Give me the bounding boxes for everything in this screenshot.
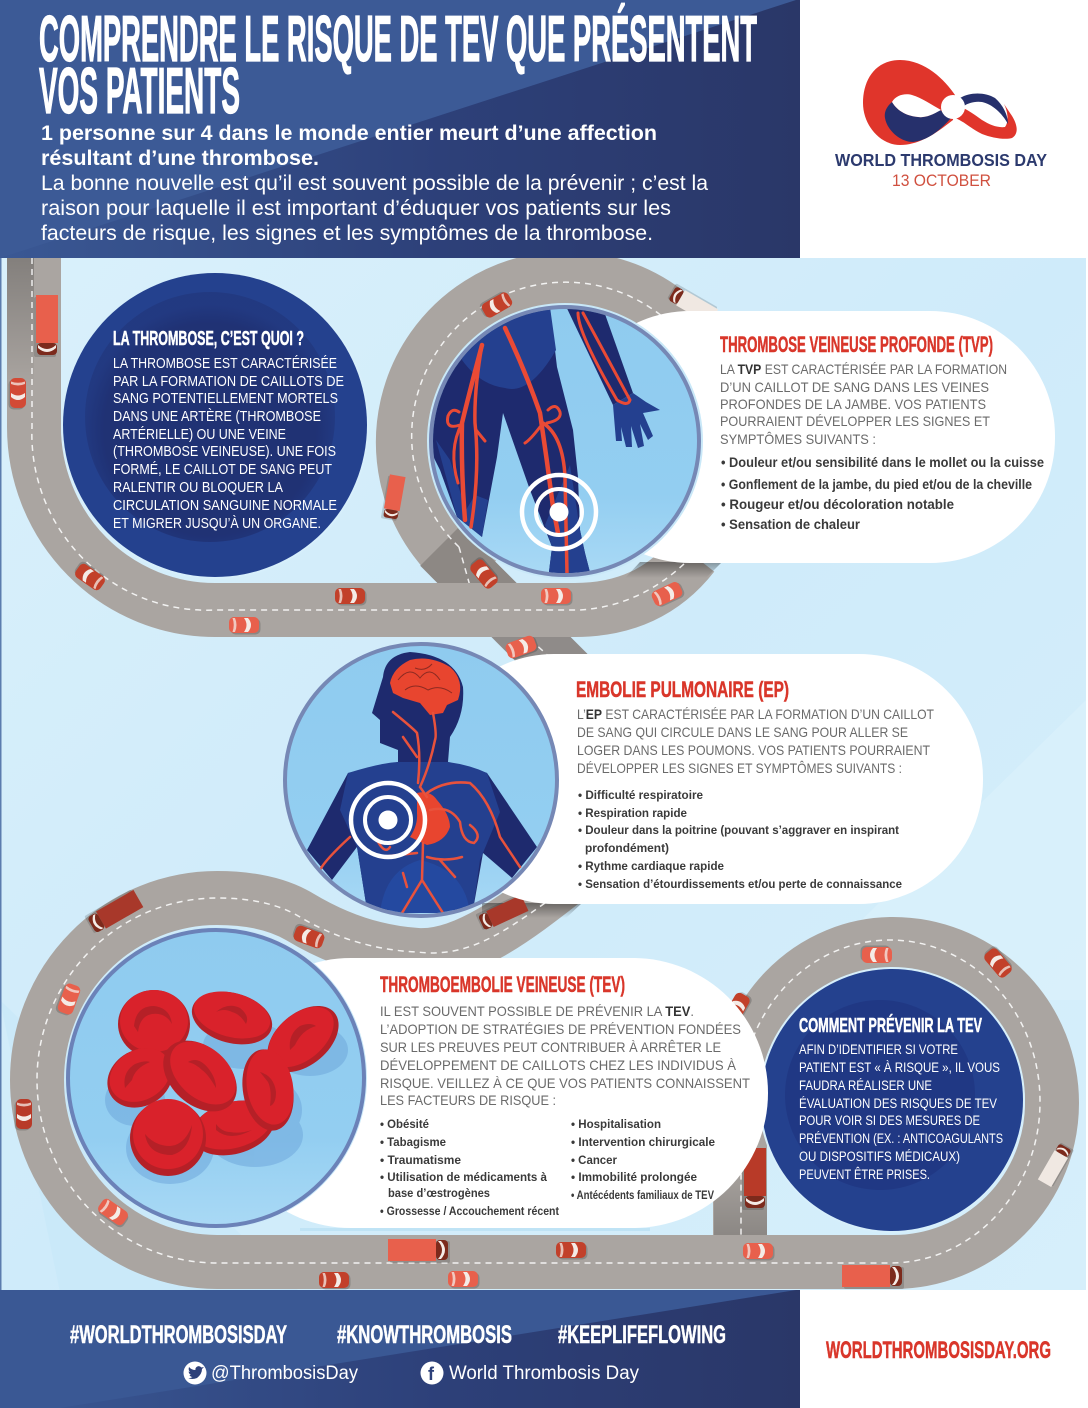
body text: AFIN D’IDENTIFIER SI VOTRE (799, 1042, 958, 1057)
symptom list: • Respiration rapide (578, 806, 687, 820)
road network (7, 255, 1052, 1263)
risk factors: left column (380, 1117, 559, 1218)
title (39, 2, 757, 127)
logo: World Thrombosis Day: WORLD THROMBOSIS DAY (835, 150, 1047, 170)
body text: POUR VOIR SI DES MESURES DE (799, 1113, 980, 1128)
panel: la thrombose (61, 271, 369, 579)
symptom list: • Sensation d’étourdissements et/ou perte de connaissance (578, 877, 902, 891)
body text: FORMÉ, LE CAILLOT DE SANG PEUT (113, 461, 332, 478)
symptom list: • Rythme cardiaque rapide (578, 859, 724, 873)
description: RISQUE. VEILLEZ À CE QUE VOS PATIENTS CONNAISSENT (380, 1075, 750, 1091)
body text: (THROMBOSE VEINEUSE). UNE FOIS (113, 444, 336, 460)
body text: FAUDRA RÉALISER UNE (799, 1078, 932, 1093)
body text: ARTÉRIELLE) OU UNE VEINE (113, 426, 286, 443)
body text: SANG POTENTIELLEMENT MORTELS (113, 391, 338, 407)
panel: thrombose veineuse profonde (425, 300, 1055, 580)
body text: ET MIGRER JUSQU’À UN ORGANE. (113, 515, 321, 532)
description (720, 361, 1007, 447)
risk factors: left column: • Traumatisme (380, 1153, 461, 1167)
body text: PEUVENT ÊTRE PRISES. (799, 1167, 930, 1182)
body text: PRÉVENTION (EX. : ANTICOAGULANTS (799, 1131, 1003, 1146)
description: DÉVELOPPEMENT DE CAILLOTS CHEZ LES INDIVIDUS À (380, 1057, 737, 1073)
facebook page: f (428, 1364, 435, 1384)
risk factors: right column: • Immobilité prolongée (571, 1170, 697, 1184)
description: IL EST SOUVENT POSSIBLE DE PRÉVENIR LA TEV. (380, 1003, 694, 1019)
heading: EMBOLIE PULMONAIRE (EP) (576, 677, 789, 702)
vehicles on the roads (8, 283, 1074, 1289)
description: LES FACTEURS DE RISQUE : (380, 1092, 556, 1108)
footer banner (0, 1290, 1088, 1408)
risk factors: left column: • Tabagisme (380, 1135, 446, 1149)
risk factors: right column: • Cancer (571, 1153, 617, 1167)
body text: PATIENT EST « À RISQUE », IL VOUS (799, 1060, 1000, 1075)
heading: LA THROMBOSE, C’EST QUOI ? (113, 328, 304, 350)
intro text: La bonne nouvelle est qu’il est souvent possible de la prévenir ; c’est la (41, 172, 708, 195)
panel: embolie pulmonaire (285, 644, 983, 916)
target marker (351, 783, 425, 857)
description (577, 706, 934, 776)
risk factors: right column: • Antécédents familiaux de TEV (571, 1188, 714, 1202)
body text: RALENTIR OU BLOQUER LA (113, 480, 283, 496)
intro text: 1 personne sur 4 dans le monde entier meurt d’une affection (41, 122, 657, 145)
symptom list: • Douleur dans la poitrine (pouvant s’aggraver en inspirant (578, 823, 899, 837)
body text (113, 355, 344, 532)
description: LOGER DANS LES POUMONS. VOS PATIENTS POURRAIENT (577, 742, 930, 758)
heading: THROMBOEMBOLIE VEINEUSE (TEV) (380, 972, 625, 997)
symptom list: profondément) (585, 841, 669, 855)
symptom list: • Rougeur et/ou décoloration notable (721, 496, 954, 512)
illustration: legs and veins (425, 300, 703, 580)
body text: PAR LA FORMATION DE CAILLOTS DE (113, 374, 344, 390)
body text: LA THROMBOSE EST CARACTÉRISÉE (113, 355, 337, 372)
symptom list: • Difficulté respiratoire (578, 788, 703, 802)
body text (799, 1042, 1003, 1182)
facebook page: World Thrombosis Day (449, 1363, 639, 1384)
symptom list: • Sensation de chaleur (721, 516, 860, 532)
description: POURRAIENT DÉVELOPPER LES SIGNES ET (720, 413, 990, 429)
body text: ÉVALUATION DES RISQUES DE TEV (799, 1096, 997, 1111)
illustration: upper body, brain, heart (285, 644, 557, 916)
description: SYMPTÔMES SUIVANTS : (720, 431, 876, 447)
symptom list (721, 454, 1044, 532)
description: SUR LES PREUVES PEUT CONTRIBUER À ARRÊTER LE (380, 1039, 721, 1055)
risk factors: left column: base d’œstrogènes (388, 1186, 490, 1200)
panel: comment prevenir la TEV (759, 967, 1025, 1233)
risk factors: left column: • Obésité (380, 1117, 429, 1131)
risk factors: right column: • Intervention chirurgicale (571, 1135, 715, 1149)
symptom list: • Gonflement de la jambe, du pied et/ou de la cheville (721, 476, 1032, 492)
description: PROFONDES DE LA JAMBE. VOS PATIENTS (720, 396, 986, 412)
logo: World Thrombosis Day: 13 OCTOBER (892, 172, 991, 190)
intro text: facteurs de risque, les signes et les symptômes de la thrombose. (41, 222, 653, 245)
intro text: raison pour laquelle il est important d’éduquer vos patients sur les (41, 197, 671, 220)
heading: COMMENT PRÉVENIR LA TEV (799, 1014, 982, 1037)
illustration: red blood cells (65, 927, 367, 1229)
body text: DANS UNE ARTÈRE (THROMBOSE (113, 408, 321, 425)
symptom list (578, 788, 902, 891)
title: VOS PATIENTS (39, 54, 240, 127)
risk factors: left column: • Grossesse / Accouchement récent (380, 1204, 559, 1218)
description: LA TVP EST CARACTÉRISÉE PAR LA FORMATION (720, 361, 1007, 377)
intro text: résultant d’une thrombose. (41, 147, 319, 170)
hashtags: #KNOWTHROMBOSIS (337, 1321, 512, 1349)
intro text (41, 122, 708, 245)
description: DE SANG QUI CIRCULE DANS LE SANG POUR ALLER SE (577, 724, 908, 740)
page background (0, 255, 1086, 1292)
description (380, 1003, 750, 1108)
risk factors: right column (571, 1117, 715, 1202)
hashtags: #WORLDTHROMBOSISDAY (70, 1321, 287, 1349)
description: D’UN CAILLOT DE SANG DANS LES VEINES (720, 379, 989, 395)
twitter handle: @ThrombosisDay (211, 1363, 358, 1384)
body text: CIRCULATION SANGUINE NORMALE (113, 498, 337, 514)
description: L’EP EST CARACTÉRISÉE PAR LA FORMATION D’UN CAILLOT (577, 706, 934, 722)
risk factors: right column: • Hospitalisation (571, 1117, 661, 1131)
panel: thromboembolie veineuse (65, 927, 768, 1231)
description: DÉVELOPPER LES SIGNES ET SYMPTÔMES SUIVANTS : (577, 760, 902, 776)
symptom list: • Douleur et/ou sensibilité dans le mollet ou la cuisse (721, 454, 1044, 470)
description: L’ADOPTION DE STRATÉGIES DE PRÉVENTION FONDÉES (380, 1021, 741, 1037)
header banner (0, 0, 1088, 258)
risk factors: left column: • Utilisation de médicaments à (380, 1170, 547, 1184)
body text: OU DISPOSITIFS MÉDICAUX) (799, 1149, 960, 1164)
hashtags (70, 1321, 726, 1349)
target marker (522, 475, 596, 549)
logo: World Thrombosis Day (835, 60, 1047, 190)
hashtags: #KEEPLIFEFLOWING (558, 1321, 726, 1349)
